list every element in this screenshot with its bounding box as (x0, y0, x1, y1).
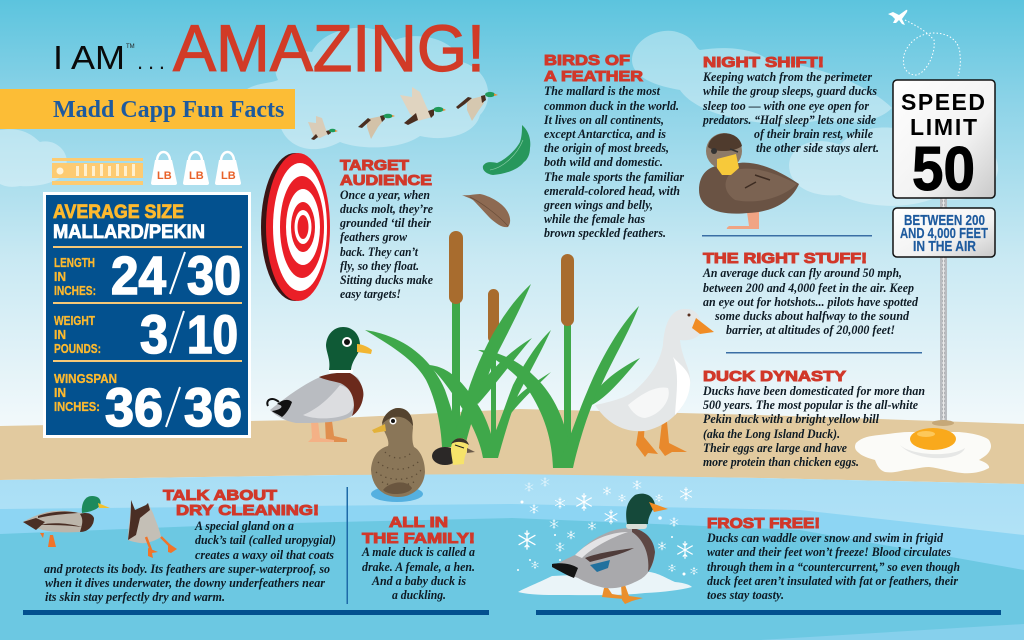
text: talk about dry cleaning: DRY CLEANING! (176, 502, 319, 519)
text: birds of a feather: A FEATHER (544, 68, 643, 85)
text: all in the family: THE FAMILY! (362, 530, 475, 547)
mallard drake standing (267, 327, 372, 442)
blade H (556, 306, 639, 468)
text: night shift: NIGHT SHIFT! (703, 54, 824, 71)
eye (688, 314, 690, 316)
legs (602, 585, 643, 604)
duck on snow (518, 494, 692, 604)
text: target audience: Once a year, when (340, 187, 430, 202)
text: all in the family: A male duck is called a (361, 544, 475, 559)
weight row: WEIGHT (54, 313, 95, 328)
icon: weights: LB (221, 170, 236, 182)
text: target audience: TARGET (340, 157, 409, 174)
icon: fried egg (855, 428, 991, 473)
text: duck dynasty (702, 368, 925, 469)
blade B (450, 284, 531, 447)
wingspan row: INCHES: (54, 399, 100, 414)
weight row (54, 305, 238, 365)
cattail heads (449, 231, 574, 343)
text: target audience: fly, so they float. (340, 258, 419, 273)
text: target audience: Sitting ducks make (340, 272, 433, 287)
text: target audience: ducks molt, they’re (340, 201, 433, 216)
wingspan row: 36 (105, 378, 163, 438)
wingspan row: IN (54, 385, 66, 400)
text: talk about dry cleaning: creates a waxy oil that coats (195, 547, 334, 562)
clouds (0, 28, 998, 206)
text: night shift: of their brain rest, while (754, 126, 873, 141)
text: talk about dry cleaning: duck’s tail (called uropygial) (195, 532, 336, 547)
text: frost free: Ducks can waddle over snow and swim in frigid (706, 530, 943, 545)
text: talk about dry cleaning: and protects its body. Its feathers are super-waterproof, so (44, 561, 330, 576)
banner: Madd Capp Fun Facts (0, 89, 295, 129)
text: birds of a feather: brown speckled feathers. (544, 225, 666, 240)
text: talk about dry cleaning (44, 487, 336, 604)
body (595, 309, 702, 431)
text: the right stuff: THE RIGHT STUFF! (703, 250, 867, 267)
bill (357, 344, 372, 354)
speed limit sign (893, 80, 995, 426)
text: frost free: through them in a “countercurrent,” so even though (707, 559, 960, 574)
divider (346, 487, 348, 604)
altitude sign: AND 4,000 FEET (900, 226, 988, 242)
blade D (478, 338, 532, 404)
length row: INCHES: (54, 283, 96, 298)
head (626, 494, 655, 524)
main sign: LIMIT (910, 114, 977, 140)
chest (632, 528, 655, 572)
text: night shift: Keeping watch from the perimeter (702, 69, 873, 84)
text: all in the family (361, 514, 475, 602)
divider (702, 235, 872, 236)
icon: plane (888, 10, 960, 76)
altitude sign: IN THE AIR (913, 239, 976, 255)
cattail stems (452, 300, 571, 465)
wing tip (552, 563, 578, 578)
text: night shift: predators. “Half sleep” lets one side (702, 112, 876, 127)
icon: sleeping duck (699, 133, 799, 229)
flank (303, 385, 355, 418)
text: birds of a feather: BIRDS OF (544, 52, 630, 69)
icon: weights (151, 152, 241, 185)
wing streak (585, 548, 634, 562)
text: all in the family: a duckling. (392, 587, 446, 602)
title: TM (126, 44, 135, 50)
text: target audience: feathers grow (340, 229, 407, 244)
plants: cattails and reeds (365, 231, 640, 468)
text: frost free: duck feet aren’t insulated with fat or feathers, their (707, 573, 959, 588)
text: frost free (706, 515, 960, 602)
text: birds of a feather: common duck in the world. (544, 98, 679, 113)
text: frost free: toes stay toasty. (707, 587, 784, 602)
title: ... (137, 49, 165, 74)
text: birds of a feather: emerald-colored head, with (544, 183, 680, 198)
text: target audience: AUDIENCE (340, 172, 432, 189)
text: birds of a feather: It lives on all continents, (543, 112, 664, 127)
text: night shift: while the group sleeps, guard ducks (703, 83, 877, 98)
blade A (365, 330, 462, 447)
length row (54, 246, 241, 306)
divider (726, 352, 922, 354)
length row: 30 (187, 246, 241, 306)
body (270, 373, 362, 423)
text: all in the family: And a baby duck is (371, 573, 466, 588)
duck 4 (456, 92, 498, 121)
body (552, 528, 654, 588)
bill (692, 318, 714, 334)
water (0, 474, 1024, 640)
swimming duck (23, 496, 110, 547)
weight row: POUNDS: (54, 341, 101, 356)
icon: brown feather (462, 194, 510, 227)
female mallard (371, 408, 425, 502)
duck 2 (358, 114, 395, 139)
speculum (590, 560, 610, 572)
altitude sign: BETWEEN 200 (904, 213, 985, 229)
banner: Madd Capp Fun Facts: Madd Capp Fun Facts (53, 97, 284, 123)
text: birds of a feather (543, 52, 685, 240)
bill (649, 502, 668, 512)
eye (342, 337, 352, 347)
text: night shift: sleep too — with one eye open for (702, 98, 870, 113)
icon: green feather (483, 125, 530, 175)
text: birds of a feather: The male sports the familiar (544, 169, 685, 184)
text: birds of a feather: the origin of most breeds, (544, 140, 669, 155)
legs (308, 421, 347, 442)
weight row: 3 (140, 305, 168, 365)
text: target audience (339, 157, 433, 301)
text: duck dynasty: DUCK DYNASTY (703, 368, 846, 385)
bottom rules (23, 610, 1001, 615)
icon: weights: LB (157, 170, 172, 182)
main sign: SPEED (901, 89, 985, 115)
wing (628, 387, 669, 418)
weight row: 10 (187, 305, 238, 365)
chest highlight (673, 357, 690, 415)
text: birds of a feather: green wings and belly, (543, 197, 653, 212)
text: target audience: grounded ‘til their (339, 215, 432, 230)
text: talk about dry cleaning: A special gland on a (194, 518, 294, 533)
text: the right stuff: some ducks about halfway to the sound (714, 308, 909, 323)
legs (636, 420, 687, 457)
icon: ruler (52, 158, 143, 185)
white pekin duck (595, 309, 714, 457)
panel: average size (44, 194, 250, 438)
snowflakes (517, 477, 698, 576)
icon: target (261, 153, 330, 301)
text: duck dynasty: 500 years. The most popular is the all-white (703, 397, 918, 412)
wingspan row: WINGSPAN (54, 371, 117, 386)
text: birds of a feather: while the female has (544, 211, 645, 226)
blade F (503, 372, 551, 425)
back stripe (575, 532, 628, 558)
head (326, 327, 360, 370)
text: duck dynasty: Ducks have been domesticated for more than (702, 383, 925, 398)
main sign (893, 80, 995, 204)
text: target audience: easy targets! (340, 286, 401, 301)
panel heading: MALLARD/PEKIN (53, 221, 205, 243)
text: birds of a feather: both wild and domestic. (544, 154, 663, 169)
text: duck dynasty: Pekin duck with a bright yellow bill (703, 411, 879, 426)
wingspan row (54, 371, 242, 438)
duck 3 (400, 87, 446, 125)
tail (267, 399, 292, 417)
title: I AM (53, 39, 125, 76)
snow pile (518, 572, 692, 595)
text: talk about dry cleaning: TALK ABOUT (163, 487, 277, 504)
blade I (592, 358, 640, 405)
text: duck dynasty: more protein than chicken eggs. (703, 454, 859, 469)
text: all in the family: drake. A female, a hen. (362, 559, 475, 574)
wingspan row: 36 (184, 378, 242, 438)
duck 1 (308, 116, 338, 140)
text: birds of a feather: The mallard is the most (544, 83, 660, 98)
panel heading (53, 201, 205, 243)
text: the right stuff: an eye out for hotshots... pilots have spotted (703, 294, 918, 309)
text: the right stuff: An average duck can fly around 50 mph, (702, 265, 902, 280)
text: talk about dry cleaning: when it dives underwater, the downy underfeathers near (45, 575, 326, 590)
text: night shift (702, 54, 879, 155)
text: duck dynasty: Their eggs are large and have (703, 440, 847, 455)
text: talk about dry cleaning: its skin stay perfectly dry and warm. (45, 589, 225, 604)
neck ring (626, 523, 647, 529)
sky background (0, 0, 1024, 430)
text: frost free: FROST FREE! (707, 515, 820, 532)
text: the right stuff: barrier, at altitudes of 20,000 feet! (726, 322, 895, 337)
text: target audience: back. They can’t (340, 244, 418, 259)
text: the right stuff (702, 250, 918, 337)
icon: weights: LB (189, 170, 204, 182)
length row: LENGTH (54, 255, 95, 270)
sand bank (0, 409, 1024, 484)
duckling (432, 438, 475, 465)
title: AMAZING! (173, 11, 485, 85)
diving duck (128, 500, 177, 558)
blade E (483, 330, 551, 458)
text: night shift: the other side stays alert. (756, 140, 879, 155)
text: frost free: water and their feet won’t freeze! Blood circulates (707, 544, 951, 559)
blade G (478, 350, 573, 468)
text: the right stuff: between 200 and 4,000 feet in the air. Keep (703, 280, 914, 295)
length row: 24 (111, 246, 166, 306)
neck ring (329, 369, 353, 373)
sign post (932, 198, 954, 426)
panel heading: AVERAGE SIZE (53, 201, 184, 223)
altitude sign (893, 208, 995, 257)
weight row: IN (54, 327, 66, 342)
text: duck dynasty: (aka the Long Island Duck). (703, 426, 840, 441)
text: all in the family: ALL IN (389, 514, 448, 531)
icon: flying ducks (308, 87, 498, 140)
main sign: 50 (912, 135, 975, 204)
reed blades (365, 284, 640, 468)
blade C (428, 365, 498, 458)
length row: IN (54, 269, 66, 284)
text: birds of a feather: except Antarctica, and is (544, 126, 666, 141)
chest (319, 373, 363, 416)
